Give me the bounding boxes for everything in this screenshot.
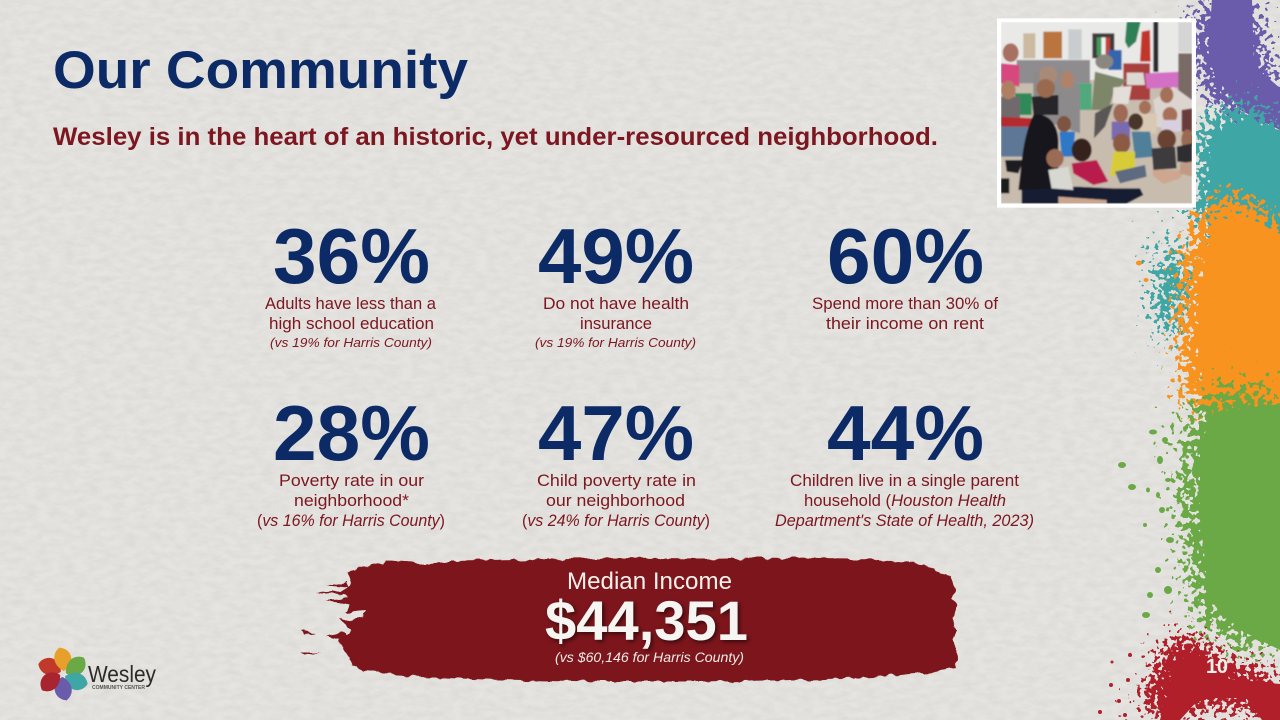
page number: 10 [1206, 656, 1228, 678]
comparison note: (vs $60,146 for Harris County) [555, 650, 744, 665]
stat: 49 percent uninsured: (vs 19% for Harris County) [535, 335, 696, 350]
callout: median income [301, 558, 958, 682]
subtitle: Wesley is in the heart of an historic, yet under-resourced neighborhood. [53, 123, 938, 151]
stat: 60 percent rent burden: their income on rent [826, 315, 984, 333]
stat: 47 percent child poverty: our neighborhood [546, 492, 685, 510]
stat: 36 percent adults: 36% [273, 212, 430, 300]
stat: 28 percent poverty [257, 389, 445, 530]
stat: 49 percent uninsured [535, 212, 696, 350]
stat: 49 percent uninsured: 49% [538, 212, 694, 300]
paint splatter decoration [1098, 0, 1280, 720]
stat: 60 percent rent burden [812, 212, 998, 333]
stat: 60 percent rent burden: 60% [827, 212, 984, 300]
logo tagline: COMMUNITY CENTER [92, 685, 145, 691]
stat: 36 percent adults: high school education [269, 315, 434, 333]
logo wordmark: Wesley [88, 661, 156, 687]
icon: pinwheel [36, 647, 90, 701]
brush stroke banner [301, 558, 958, 682]
stat: 47 percent child poverty [522, 389, 710, 530]
stat: 28 percent poverty: Poverty rate in our [279, 472, 425, 490]
stat: 44 percent single parent [775, 389, 1034, 530]
stat: 60 percent rent burden: Spend more than 30% of [812, 295, 998, 313]
stat: 28 percent poverty: neighborhood* [294, 492, 410, 510]
stat: 47 percent child poverty: (vs 24% for Harris County) [522, 512, 710, 530]
stat: 49 percent uninsured: Do not have health [543, 295, 689, 313]
stat: 44 percent single parent: Department's State of Health, 2023) [775, 512, 1034, 530]
stat: 44 percent single parent: 44% [827, 389, 984, 477]
stat: 28 percent poverty: (vs 16% for Harris County) [257, 512, 445, 530]
stat: 44 percent single parent: household (Houston Health [804, 492, 1006, 510]
stat: 28 percent poverty: 28% [273, 389, 430, 477]
stat: 49 percent uninsured: insurance [580, 315, 652, 333]
stat: 36 percent adults: (vs 19% for Harris County) [270, 335, 432, 350]
stat: 47 percent child poverty: Child poverty rate in [537, 472, 696, 490]
title: Our Community [53, 41, 469, 100]
median income value: $44,351 [545, 589, 748, 652]
median income label: Median Income [567, 568, 732, 595]
stat: 36 percent adults [265, 212, 437, 350]
logo: Wesley Community Center [36, 647, 156, 701]
photo: community gathering [997, 18, 1196, 208]
stat: 47 percent child poverty: 47% [538, 389, 694, 477]
stat: 36 percent adults: Adults have less than a [265, 295, 437, 313]
stat: 44 percent single parent: Children live in a single parent [790, 472, 1019, 490]
